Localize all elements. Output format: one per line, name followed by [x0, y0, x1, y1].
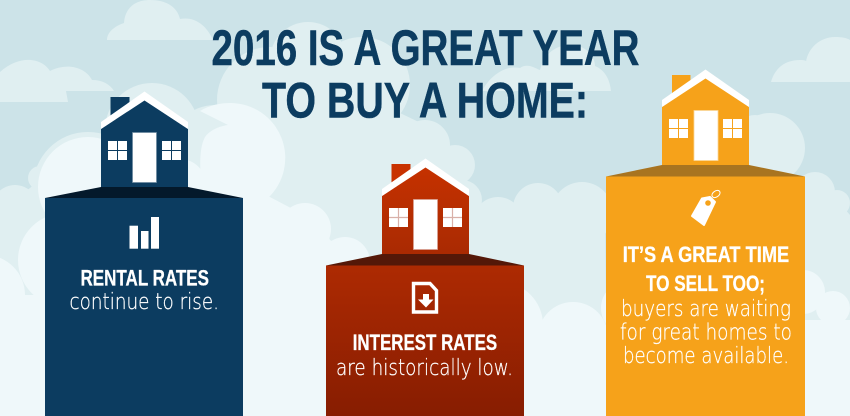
- panel: great time to sell: [606, 70, 805, 416]
- icon: orange house: [662, 70, 749, 165]
- icon: document with down arrow: [414, 284, 436, 312]
- column: [45, 198, 243, 416]
- text: sell too: buyers are waiting: [621, 297, 791, 322]
- text: rental rates: continue to rise.: [70, 290, 219, 315]
- roof-shaped shadow: [606, 165, 805, 176]
- title: 2016 IS A GREAT YEAR: [212, 20, 640, 76]
- title: TO BUY A HOME:: [262, 73, 588, 129]
- roof-shaped shadow: [45, 187, 243, 198]
- text: interest rates: INTEREST RATES: [353, 330, 497, 355]
- icon: blue house: [101, 92, 188, 187]
- text: sell too: TO SELL TOO;: [646, 271, 765, 296]
- panel: interest rates: [326, 158, 524, 416]
- text: rental rates: RENTAL RATES: [80, 266, 209, 291]
- text: sell too: for great homes to: [620, 320, 792, 346]
- icon: red house: [382, 158, 469, 254]
- background clouds: front layer: [0, 103, 850, 416]
- text: interest rates: are historically low.: [336, 356, 513, 381]
- title: [212, 20, 640, 129]
- text: rental rates: [70, 266, 219, 315]
- column: [326, 266, 524, 416]
- text: sell too: become available.: [623, 344, 789, 369]
- roof-shaped shadow: [326, 254, 524, 266]
- text: sell too: IT’S A GREAT TIME: [623, 242, 789, 267]
- icon: price tag: [692, 189, 721, 225]
- panel: rental rates: [45, 92, 243, 416]
- text: sell too: [620, 242, 792, 369]
- icon: bar chart: [130, 217, 159, 249]
- column: [606, 176, 805, 416]
- text: interest rates: [336, 330, 513, 381]
